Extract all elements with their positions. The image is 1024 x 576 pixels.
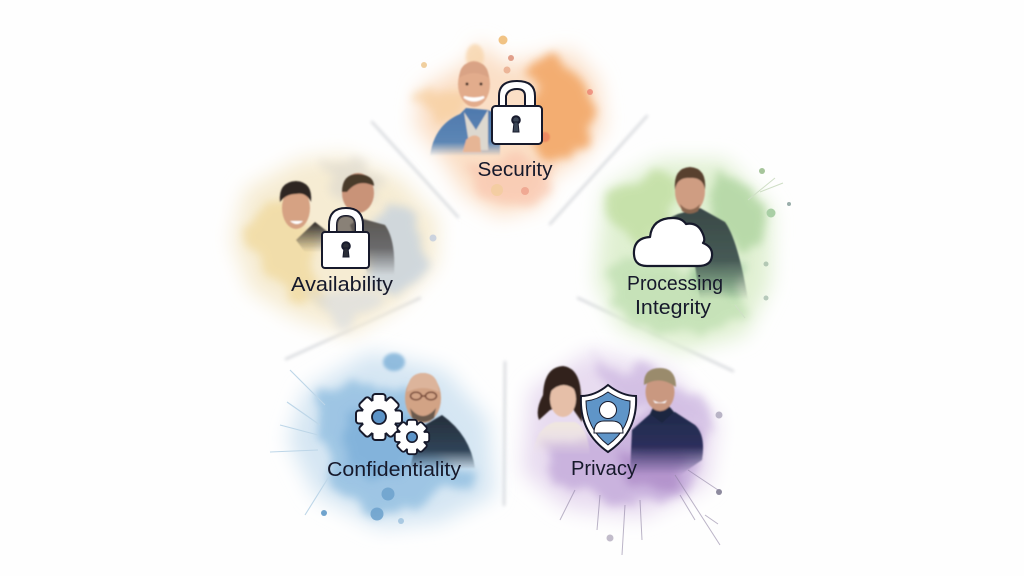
panel: availability — [232, 155, 438, 335]
dividers between segments — [286, 116, 733, 505]
panel: security — [415, 36, 604, 216]
person: man on right — [342, 173, 394, 275]
panel: processing integrity — [596, 160, 791, 352]
icon: padlock — [322, 208, 369, 268]
splash rays: purple — [560, 470, 720, 555]
icon: small gear — [396, 421, 428, 453]
person: man on left — [280, 181, 328, 252]
label: Processing Integrity: Processing — [627, 273, 723, 295]
label: Availability: Availability — [291, 274, 393, 296]
label: Security: Security — [478, 159, 552, 181]
watercolor: purple — [522, 352, 722, 555]
panel: privacy — [522, 352, 722, 555]
label: Privacy: Privacy — [571, 458, 637, 480]
icon: large gear — [357, 395, 401, 439]
person: man in blue jacket — [430, 61, 500, 156]
person: bald man with glasses — [405, 373, 475, 468]
watercolor: yellow and blue — [232, 155, 438, 335]
splash rays: green — [735, 178, 783, 318]
watercolor: orange — [415, 36, 604, 216]
icon: cloud — [634, 218, 712, 266]
label: Processing Integrity: Integrity — [635, 297, 711, 319]
person: woman with dark hair — [533, 366, 590, 455]
label: Confidentiality: Confidentiality — [327, 459, 461, 481]
label: Processing Integrity — [627, 273, 723, 319]
person: man in cap — [630, 368, 703, 475]
splash rays: blue — [270, 370, 330, 515]
icon: shield with person — [581, 385, 636, 452]
panel: confidentiality — [270, 352, 495, 528]
icon: padlock — [492, 81, 542, 144]
watercolor: green — [596, 160, 791, 352]
watercolor: blue — [270, 352, 495, 528]
person: man in dark shirt — [665, 167, 748, 300]
